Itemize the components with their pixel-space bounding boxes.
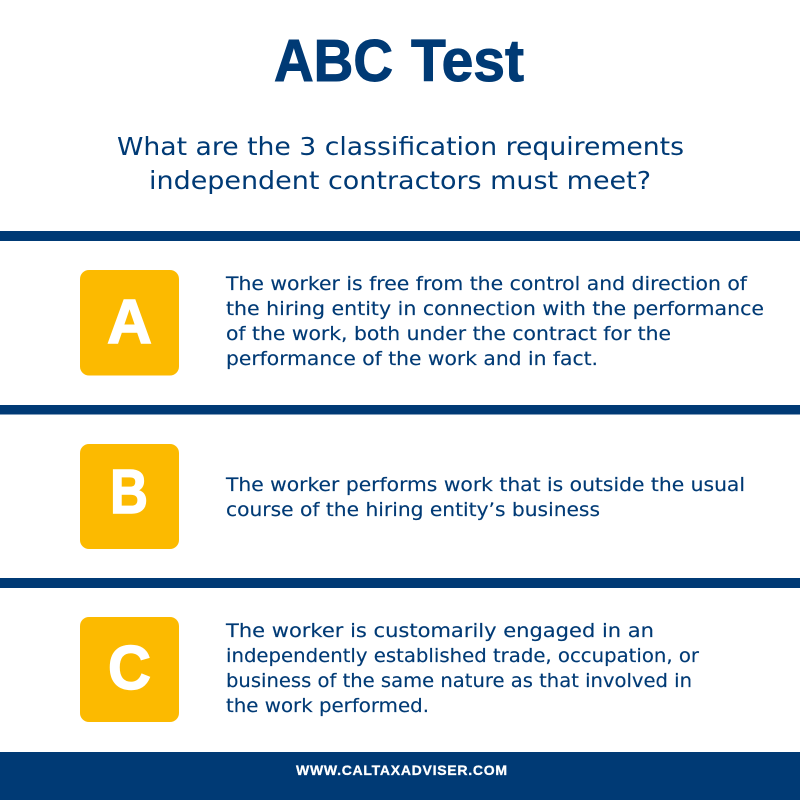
subtitle: What are the 3 classification requirements <box>117 132 684 161</box>
icon: badge C: C <box>108 634 151 703</box>
icon: badge B: B <box>110 458 148 527</box>
text: requirement B description <box>225 475 745 521</box>
subtitle: independent contractors must meet? <box>149 166 651 195</box>
text: requirement A description: the hiring entity in connection with the performance <box>226 299 764 320</box>
title: Test <box>411 28 524 94</box>
text: requirement A description: of the work, both under the contract for the <box>226 324 671 345</box>
text: requirement C description: business of the same nature as that involved in <box>226 671 692 692</box>
title <box>274 28 524 94</box>
icon: badge A <box>80 270 179 376</box>
text: requirement C description <box>225 621 699 717</box>
text: requirement C description: The worker is customarily engaged in an <box>225 621 654 642</box>
text: requirement C description: independently established trade, occupation, or <box>226 646 699 667</box>
icon: badge A: A <box>107 288 152 357</box>
icon: badge B <box>80 444 179 549</box>
panel: requirement A <box>80 270 764 376</box>
footer website text: WWW.CALTAXADVISER.COM <box>296 762 507 778</box>
panel: requirement C <box>80 617 699 722</box>
text: requirement C description: the work performed. <box>226 696 429 717</box>
text: requirement B description: course of the hiring entity’s business <box>226 500 600 521</box>
text: requirement A description: performance of the work and in fact. <box>226 349 598 370</box>
lower divider bar <box>0 578 800 588</box>
top divider bar <box>0 231 800 241</box>
panel: requirement B <box>80 444 745 549</box>
text: requirement A description <box>225 274 764 370</box>
text: requirement A description: The worker is free from the control and direction of <box>225 274 747 295</box>
text: requirement B description: The worker performs work that is outside the usual <box>225 475 745 496</box>
subtitle <box>117 132 684 195</box>
footer <box>0 752 800 800</box>
icon: badge C <box>80 617 179 722</box>
title: ABC <box>274 28 393 94</box>
middle divider bar <box>0 405 800 414</box>
